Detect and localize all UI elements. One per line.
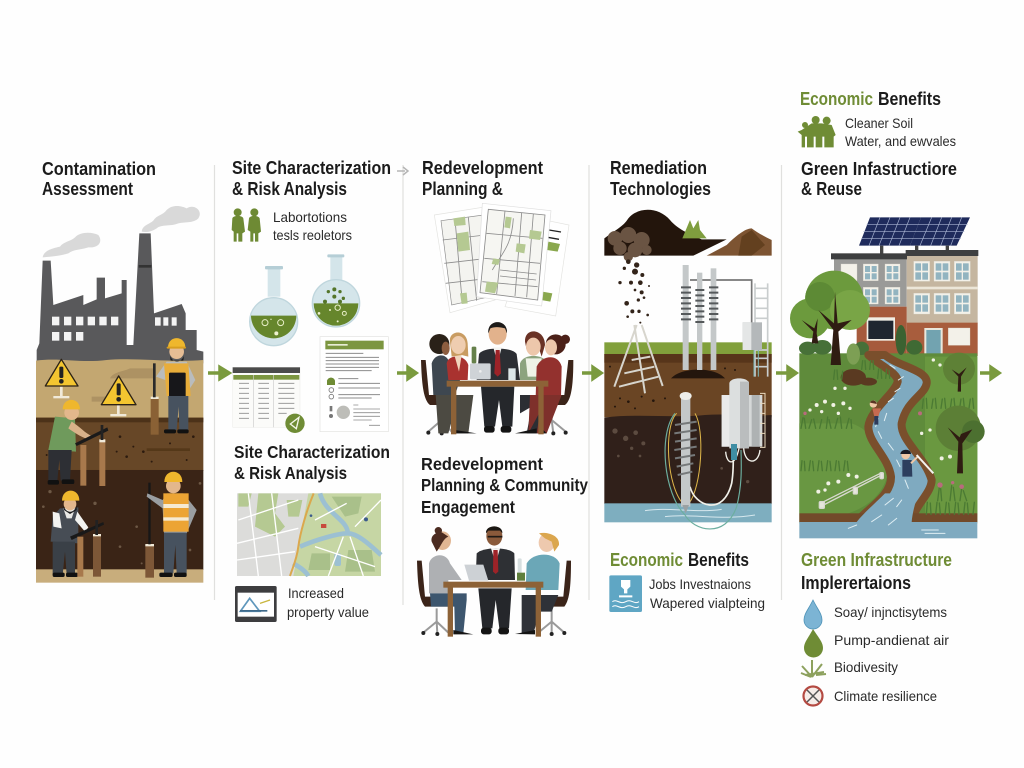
- worker bottom left: [51, 491, 104, 577]
- icon: community people: [798, 116, 836, 147]
- label: increased property value text: Increased: [288, 585, 344, 601]
- list item: biodiversity plant: Biodivesity: [834, 659, 898, 675]
- text block: Economic Benefits (cleaner soil): [800, 89, 956, 149]
- meeting group of three: [417, 526, 571, 637]
- heading: Site Characterization & Risk Analysis (top): & Risk Analysis: [232, 179, 347, 199]
- warning sign middle: [101, 376, 136, 416]
- text block: Green Infrastructure Implementations heading: Implerertaions: [801, 573, 911, 593]
- flask left: [250, 266, 298, 346]
- icon: economic benefits jobs: [609, 575, 642, 612]
- icon: lab people: [232, 208, 261, 242]
- small tree upper right: [943, 353, 975, 392]
- arrow: small grey: [397, 167, 408, 175]
- panel: laboratory illustrations: [232, 208, 390, 622]
- ladder right: [755, 283, 768, 377]
- mud mounds: [841, 369, 877, 386]
- worker with clipboard: [151, 338, 195, 435]
- icon: property value laptop: [235, 586, 277, 622]
- text block: Economic Benefits (jobs): Benefits: [688, 550, 749, 570]
- treatment tank: [722, 378, 765, 462]
- list item: water drop: Soay/ injnctisytems: [834, 604, 947, 620]
- text block: Economic Benefits (cleaner soil): Economic: [800, 89, 873, 109]
- heading: Remediation Technologies: [610, 158, 711, 199]
- river: [799, 355, 977, 538]
- label: second redevelopment heading: Redevelopment: [421, 454, 543, 474]
- heading: Redevelopment Planning: Redevelopment: [422, 158, 543, 178]
- panel: remediation technologies illustration: [604, 210, 772, 612]
- heading: Green Infrastructure & Reuse: [801, 159, 957, 199]
- arrow: step 3 to 4: [582, 368, 601, 378]
- text block: Economic Benefits (jobs): Wapered vialpteing: [650, 595, 765, 611]
- text block: Economic Benefits (jobs): Jobs Investnaions: [649, 576, 751, 592]
- heading: Remediation Technologies: Technologies: [610, 179, 711, 199]
- ladder left: [614, 325, 663, 393]
- heading: Site Characterization & Risk Analysis (top): [232, 158, 391, 199]
- site map: [237, 493, 381, 576]
- heading: Redevelopment Planning: Planning &: [422, 179, 503, 199]
- flask right: [312, 254, 360, 327]
- heading: Site Characterization & Risk Analysis (top): Site Characterization: [232, 158, 391, 178]
- footbridge railing: [819, 473, 883, 508]
- list item: climate resilience: Climate resilience: [834, 688, 937, 704]
- text block: Economic Benefits (cleaner soil): Water, and ewvales: [845, 133, 956, 149]
- label: second heading text: Site Characterization: [234, 442, 390, 462]
- solar panels: [859, 217, 970, 254]
- list item: biodiversity plant: [801, 659, 898, 677]
- list item: green drop: [804, 629, 949, 658]
- falling soil particles: [618, 259, 650, 324]
- bushes and hedges: [799, 325, 922, 365]
- arrow: step 5 onward: [980, 368, 999, 378]
- arrow: step 1 to 2: [208, 368, 229, 378]
- control box: [743, 322, 762, 377]
- panel: redevelopment planning illustrations: [417, 203, 588, 637]
- arrow: step 4 to 5: [776, 368, 796, 378]
- heading: Redevelopment Planning: [422, 158, 543, 199]
- text block: Economic Benefits (jobs): Economic: [610, 550, 683, 570]
- extraction wells: [671, 265, 752, 378]
- panel: contamination assessment illustration: [36, 206, 203, 583]
- list item: green drop: Pump-andienat air: [834, 632, 949, 648]
- label: laboratory tests text: tesls reoletors: [273, 227, 352, 243]
- arrow: step 2 to 3: [397, 368, 416, 378]
- site plan sheets: [434, 203, 569, 316]
- label: second heading text: [234, 442, 390, 483]
- data table: [233, 367, 305, 433]
- factory silhouette: [37, 233, 203, 363]
- heading: Green Infrastructure & Reuse: & Reuse: [801, 179, 862, 199]
- person wading upper: [870, 400, 881, 425]
- list item: water drop: [804, 600, 947, 629]
- label: second redevelopment heading: Planning & Community: [421, 475, 588, 495]
- ground layers: [604, 342, 772, 522]
- large trees: [790, 271, 870, 365]
- worker with orange vest: [145, 472, 197, 578]
- list item: climate resilience: [804, 686, 937, 706]
- label: laboratory tests text: [273, 209, 352, 243]
- meeting group of five: [421, 322, 573, 435]
- heading: Green Infrastructure & Reuse: Green Infastructiore: [801, 159, 957, 179]
- panel: green infrastructure illustration: [790, 116, 985, 538]
- text block: Green Infrastructure Implementations heading: [801, 550, 952, 593]
- heading: Remediation Technologies: Remediation: [610, 158, 707, 178]
- label: second redevelopment heading: Engagement: [421, 497, 515, 517]
- flowers and grasses: [801, 358, 974, 514]
- label: second redevelopment heading: [421, 454, 588, 517]
- warning sign left: [45, 359, 78, 398]
- text block: Economic Benefits (cleaner soil): Benefits: [878, 89, 941, 109]
- label: increased property value text: property value: [287, 604, 369, 620]
- tree lower right: [936, 406, 985, 473]
- heading: Contamination Assessment: Contamination: [42, 159, 156, 179]
- heading: Contamination Assessment: Assessment: [42, 179, 133, 199]
- person wading lower: [900, 450, 933, 477]
- text block: Economic Benefits (cleaner soil): Cleaner Soil: [845, 115, 913, 131]
- label: increased property value text: [287, 585, 369, 620]
- label: laboratory tests text: Labortotions: [273, 209, 347, 225]
- smoke clouds: [43, 206, 200, 257]
- screw auger well: [665, 392, 741, 529]
- lawn ground: [799, 353, 977, 523]
- worker in green shirt: [48, 400, 108, 486]
- text block: Economic Benefits (jobs): [610, 550, 765, 611]
- soil layers: [36, 359, 203, 420]
- label: second heading text: & Risk Analysis: [234, 463, 347, 483]
- heading: Contamination Assessment: [42, 159, 156, 199]
- soil mounds: [604, 210, 772, 261]
- report document: [320, 337, 388, 432]
- apartment buildings: [831, 250, 978, 356]
- text block: Green Infrastructure Implementations heading: Green Infrastructure: [801, 550, 952, 570]
